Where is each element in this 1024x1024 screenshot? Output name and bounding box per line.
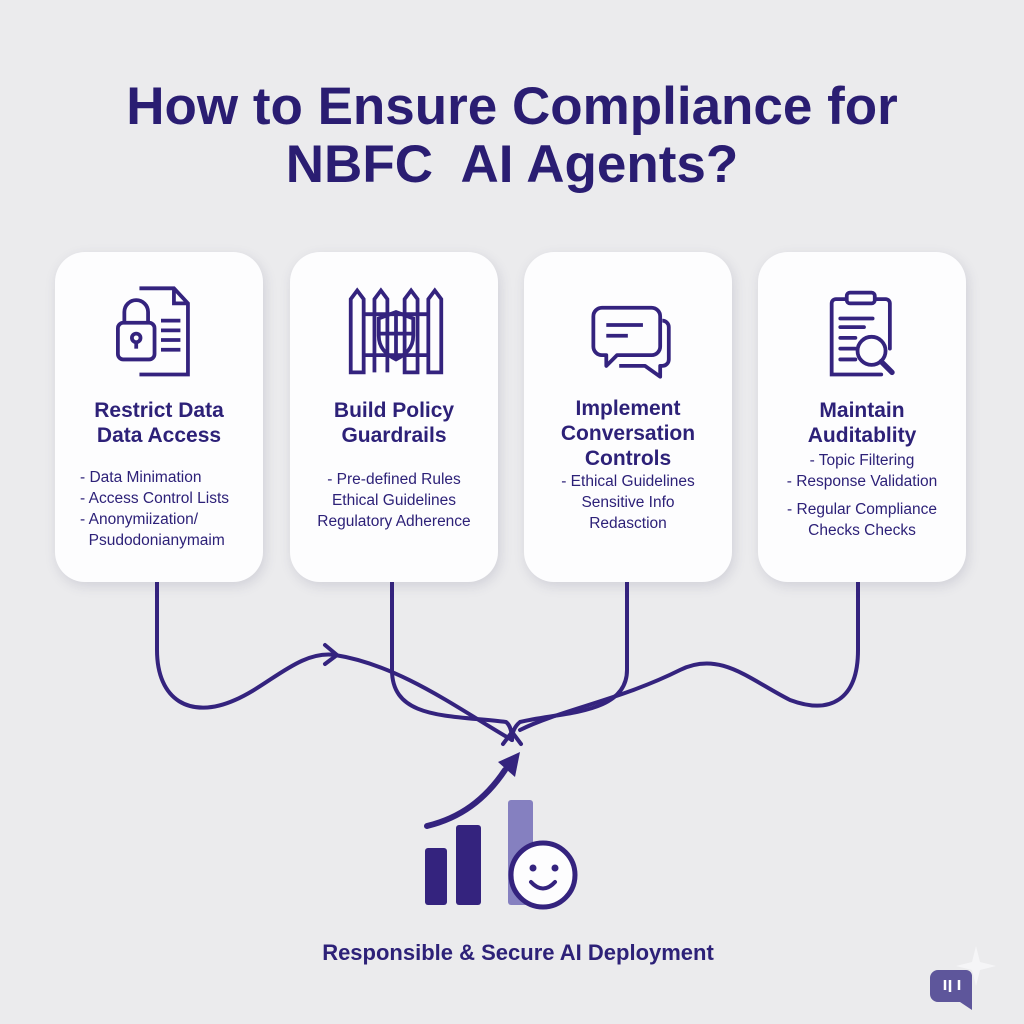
card: restrict data access	[55, 252, 263, 582]
heading: Restrict Data	[94, 399, 224, 422]
bullet list: Psudodonianymaim	[89, 532, 225, 549]
logo	[930, 948, 994, 1010]
title: How to Ensure Compliance for	[126, 77, 898, 136]
bullet list: Checks Checks	[808, 522, 916, 539]
bullet list	[561, 473, 695, 532]
bullet list: - Topic Filtering	[810, 452, 914, 469]
title	[126, 77, 898, 194]
bullet list: - Response Validation	[787, 473, 937, 490]
heading: Data Access	[97, 424, 221, 447]
bullet list: Sensitive Info	[581, 494, 675, 511]
heading	[334, 399, 454, 447]
bullet list	[317, 471, 471, 530]
heading: Conversation	[561, 422, 695, 445]
heading	[561, 397, 695, 470]
bullet list: - Data Minimation	[80, 469, 201, 486]
bullet list: Ethical Guidelines	[332, 492, 456, 509]
bullet list: Redasction	[589, 515, 667, 532]
heading: Controls	[585, 447, 671, 470]
heading: Maintain	[819, 399, 905, 422]
bullet list: - Regular Compliance	[787, 501, 937, 518]
bullet list	[787, 452, 937, 539]
heading	[94, 399, 224, 447]
icon: lock document	[116, 286, 190, 376]
heading: Guardrails	[341, 424, 447, 447]
heading: Implement	[575, 397, 681, 420]
heading: Build Policy	[334, 399, 454, 422]
heading	[808, 399, 916, 447]
card: auditability	[758, 252, 966, 582]
bullet list: - Access Control Lists	[80, 490, 229, 507]
footer caption: Responsible & Secure AI Deployment	[322, 940, 714, 965]
card: policy guardrails	[290, 252, 498, 582]
bullet list: - Pre-defined Rules	[327, 471, 461, 488]
title: NBFC AI Agents?	[286, 135, 738, 194]
bullet list: - Ethical Guidelines	[561, 473, 695, 490]
icon: growth chart with smiley	[424, 752, 578, 910]
icon: chat bubbles	[591, 306, 671, 379]
heading: Auditablity	[808, 424, 916, 447]
icon: fence shield	[348, 287, 444, 374]
bullet list	[80, 469, 229, 549]
bullet list: Regulatory Adherence	[317, 513, 471, 530]
card: conversation controls	[524, 252, 732, 582]
bullet list: - Anonymiization/	[80, 511, 198, 528]
icon: clipboard magnifier	[830, 290, 895, 376]
